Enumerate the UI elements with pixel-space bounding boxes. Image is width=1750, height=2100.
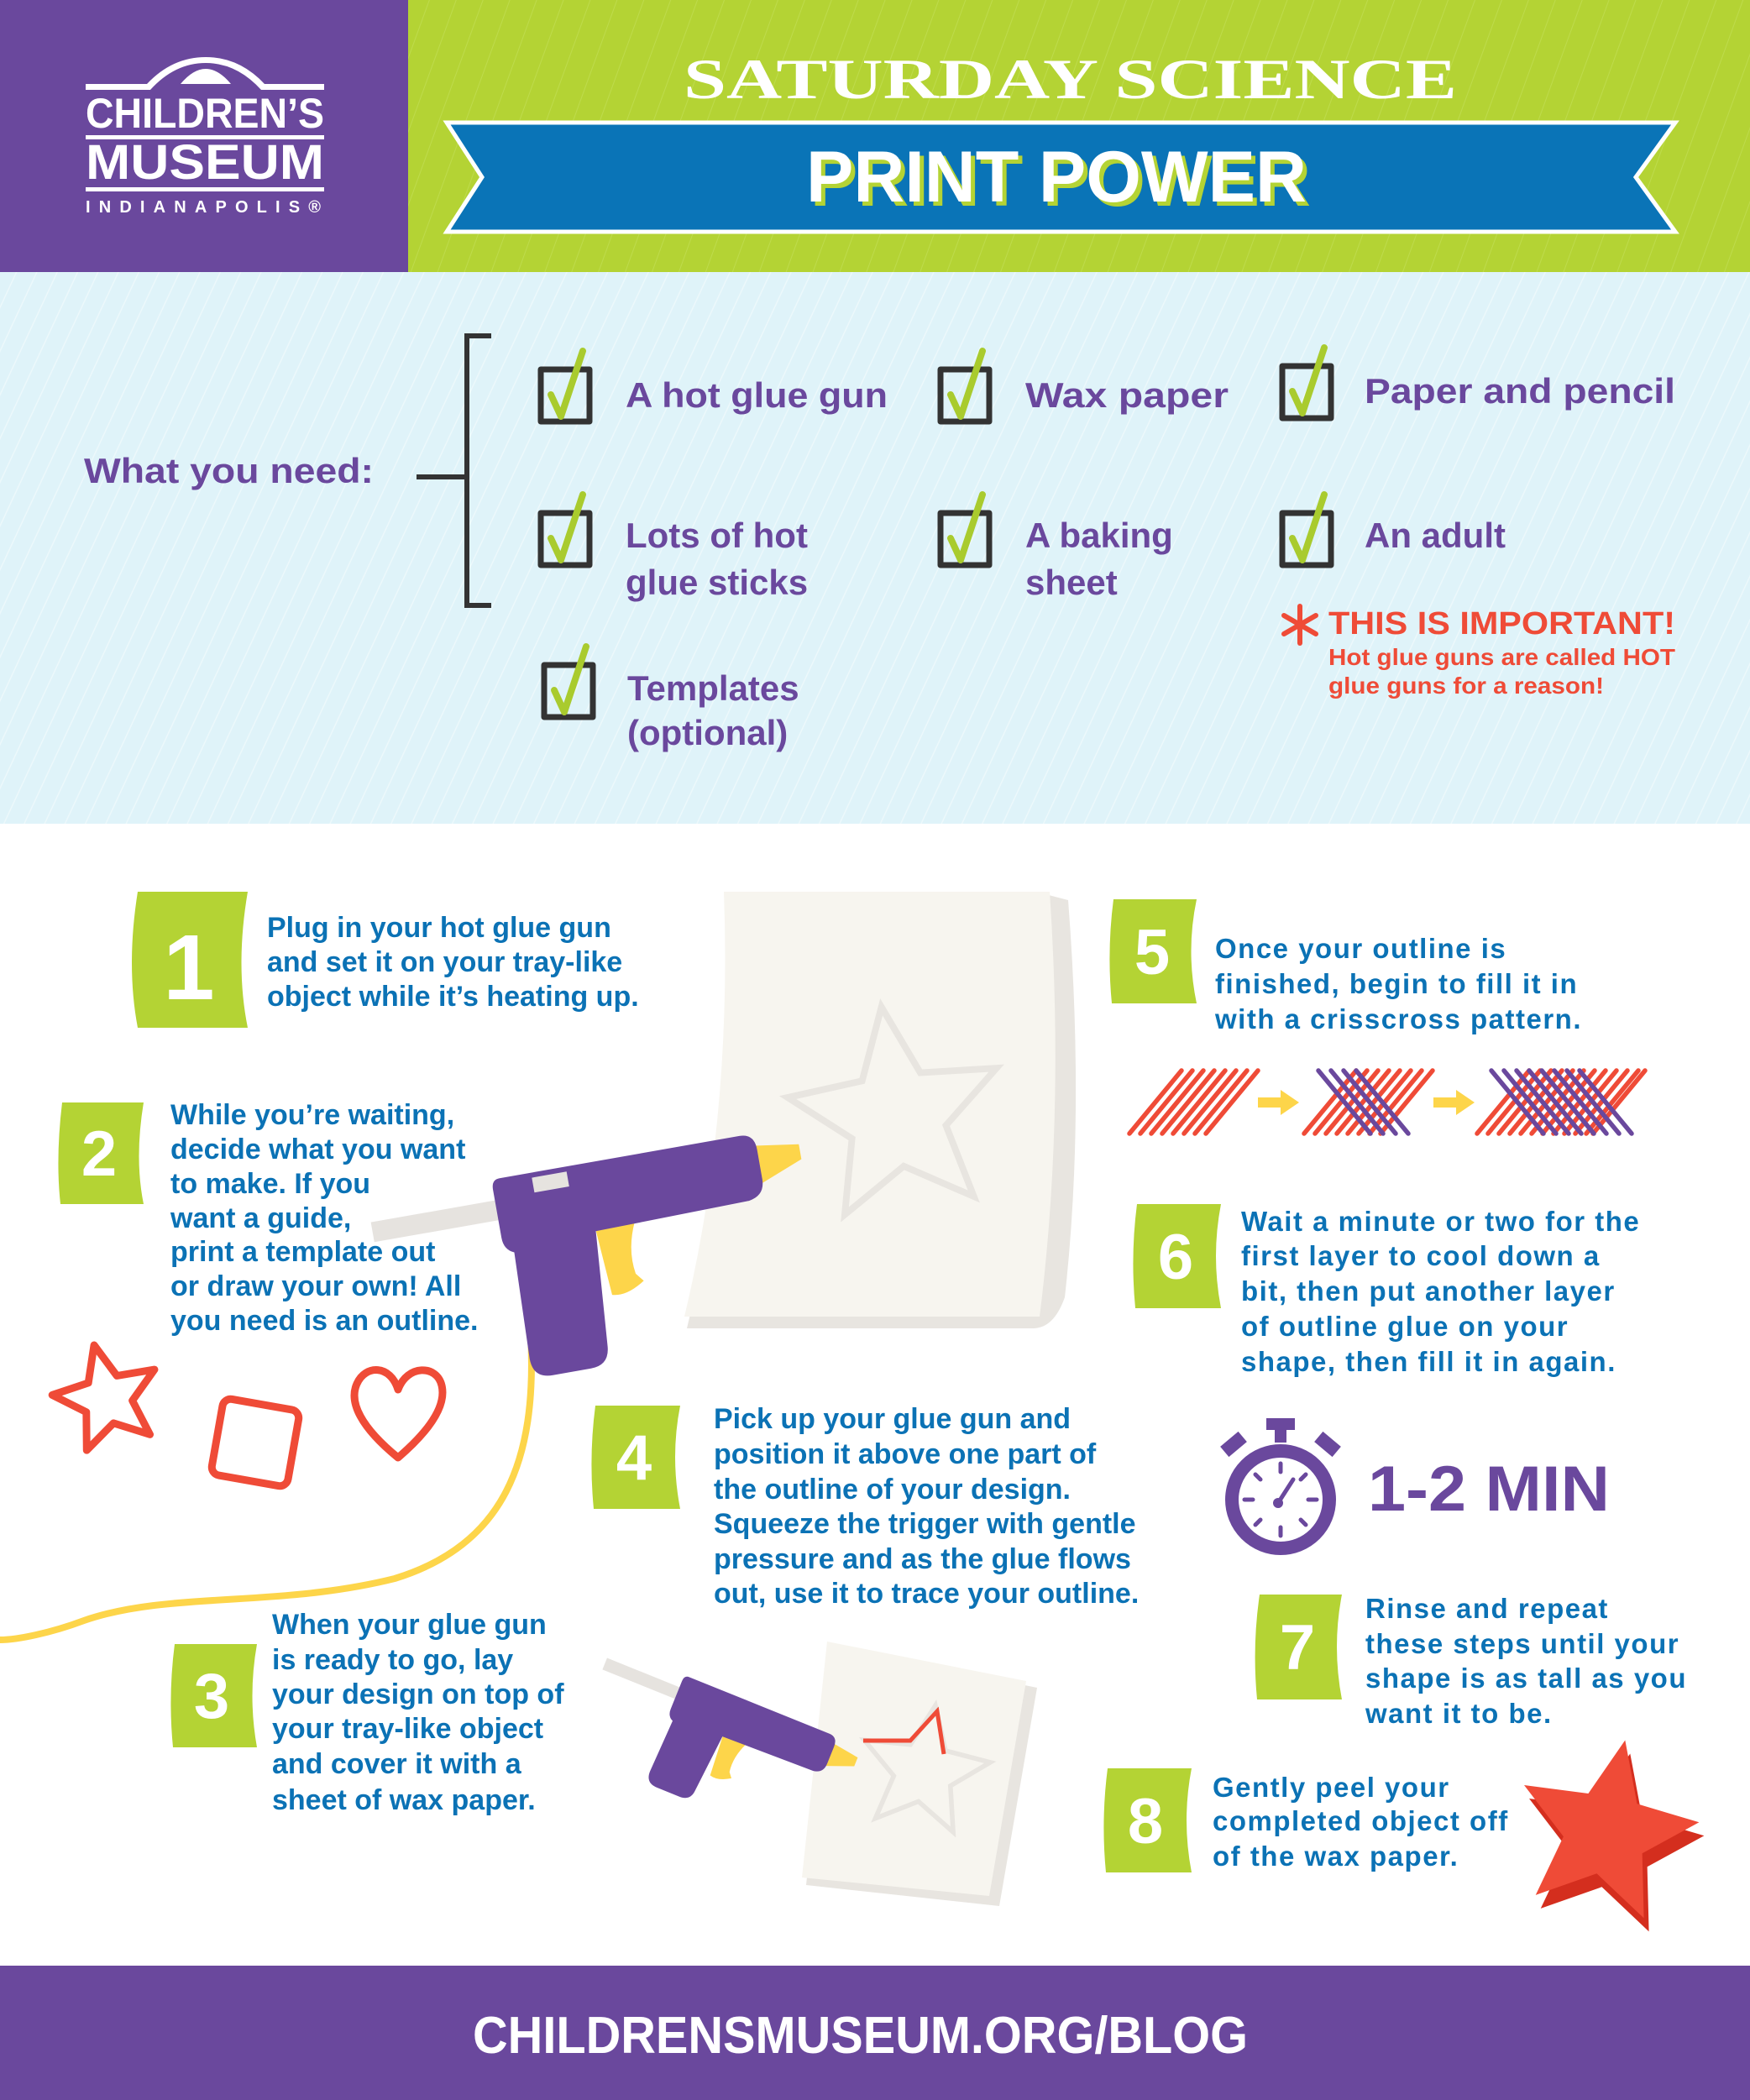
callout: important: THIS IS IMPORTANT! xyxy=(1328,606,1675,642)
step 1: object while it’s heating up. xyxy=(267,981,639,1013)
item labels: A hot glue gun xyxy=(626,375,888,415)
footer: CHILDRENSMUSEUM.ORG/BLOG xyxy=(473,2007,1248,2065)
step 6: 6 xyxy=(1158,1222,1193,1293)
step 7: shape is as tall as you xyxy=(1365,1663,1687,1694)
step 6: Wait a minute or two for the xyxy=(1241,1206,1640,1237)
illustration: small paper and gun xyxy=(569,1642,1037,1906)
item labels: Templates xyxy=(627,668,799,708)
step 4: position it above one part of xyxy=(714,1438,1097,1470)
step 2: While you’re waiting, xyxy=(170,1099,454,1131)
step 8: of the wax paper. xyxy=(1213,1841,1459,1872)
step 4: pressure and as the glue flows xyxy=(714,1543,1131,1575)
step 6: of outline glue on your xyxy=(1241,1311,1569,1342)
logo: INDIANAPOLIS® xyxy=(86,198,321,217)
step 5: finished, begin to fill it in xyxy=(1215,968,1578,999)
step 2: 2 xyxy=(81,1118,117,1190)
step 7: 7 xyxy=(1280,1612,1315,1684)
step 5 xyxy=(1109,899,1582,1034)
icon: stopwatch xyxy=(1220,1418,1341,1548)
arrows xyxy=(1258,1090,1475,1115)
step 7: want it to be. xyxy=(1365,1698,1553,1729)
header background xyxy=(0,0,1750,272)
step 4: the outline of your design. xyxy=(714,1474,1071,1506)
step 3: 3 xyxy=(194,1661,229,1732)
step 7: these steps until your xyxy=(1365,1628,1679,1659)
logo xyxy=(86,57,324,217)
illustration: big glue gun xyxy=(367,1126,830,1401)
step 5: 5 xyxy=(1134,917,1170,988)
step 5: Once your outline is xyxy=(1215,933,1506,964)
banner title: PRINT POWER xyxy=(806,137,1307,217)
item labels: (optional) xyxy=(627,713,788,752)
callout: important xyxy=(1284,606,1675,699)
step 1: and set it on your tray-like xyxy=(267,946,622,978)
step 3: When your glue gun xyxy=(272,1609,547,1641)
step 8: 8 xyxy=(1128,1786,1163,1857)
step 3: your tray-like object xyxy=(272,1713,543,1745)
item labels: glue sticks xyxy=(626,563,808,602)
step 5: with a crisscross pattern. xyxy=(1214,1003,1582,1034)
step 4: 4 xyxy=(616,1422,652,1494)
step 2: you need is an outline. xyxy=(170,1305,479,1337)
logo: CHILDREN’S xyxy=(86,90,324,137)
timer label: 1-2 MIN xyxy=(1368,1453,1610,1525)
checkboxes xyxy=(541,348,1331,717)
step 1: Plug in your hot glue gun xyxy=(267,912,611,944)
step 3: and cover it with a xyxy=(272,1748,522,1780)
footer xyxy=(0,1966,1750,2100)
step 2: want a guide, xyxy=(170,1202,351,1234)
item labels: sheet xyxy=(1025,563,1118,602)
step 2: decide what you want xyxy=(170,1134,465,1165)
banner xyxy=(447,123,1675,232)
item labels: Lots of hot xyxy=(626,516,808,555)
step 2: print a template out xyxy=(170,1236,435,1268)
step 6 xyxy=(1133,1204,1640,1377)
step 6: bit, then put another layer xyxy=(1241,1275,1616,1307)
icon: 3d red star xyxy=(1502,1721,1717,1939)
callout: important: Hot glue guns are called HOT xyxy=(1328,644,1675,670)
item labels xyxy=(626,371,1675,752)
step 1 xyxy=(132,892,639,1028)
step 4: out, use it to trace your outline. xyxy=(714,1578,1139,1610)
step 7: Rinse and repeat xyxy=(1365,1593,1609,1624)
step 7 xyxy=(1255,1593,1687,1729)
crisscross diagram xyxy=(1129,1071,1645,1134)
step 3: sheet of wax paper. xyxy=(272,1784,536,1816)
step 8 xyxy=(1103,1768,1509,1872)
step 4: Pick up your glue gun and xyxy=(714,1403,1071,1435)
step 3 xyxy=(170,1609,564,1816)
title: saturday science: SATURDAY SCIENCE xyxy=(684,47,1457,111)
item labels: A baking xyxy=(1025,516,1173,555)
bracket xyxy=(417,336,491,605)
step 3: your design on top of xyxy=(272,1678,564,1710)
step 4: Squeeze the trigger with gentle xyxy=(714,1508,1136,1540)
illustration: big wax paper with star xyxy=(684,892,1076,1328)
step 2 xyxy=(58,1099,478,1337)
heading: what you need: What you need: xyxy=(84,451,374,490)
banner title: PRINT POWER xyxy=(810,141,1311,222)
illustration: glue cord xyxy=(0,1335,532,1640)
icons: outline shapes xyxy=(43,1333,443,1487)
item labels: An adult xyxy=(1365,516,1506,555)
step 1: 1 xyxy=(163,916,215,1019)
step 2: or draw your own! All xyxy=(170,1270,461,1302)
step 8: completed object off xyxy=(1213,1805,1509,1836)
logo: MUSEUM xyxy=(86,135,324,190)
step 3: is ready to go, lay xyxy=(272,1644,513,1676)
step 6: first layer to cool down a xyxy=(1241,1240,1601,1271)
step 2: to make. If you xyxy=(170,1168,370,1200)
item labels: Wax paper xyxy=(1025,375,1229,415)
step 6: shape, then fill it in again. xyxy=(1241,1346,1616,1377)
step 8: Gently peel your xyxy=(1213,1772,1450,1803)
panel: what you need xyxy=(0,272,1750,824)
callout: important: glue guns for a reason! xyxy=(1328,673,1604,699)
item labels: Paper and pencil xyxy=(1365,371,1675,411)
step 4 xyxy=(591,1403,1139,1610)
